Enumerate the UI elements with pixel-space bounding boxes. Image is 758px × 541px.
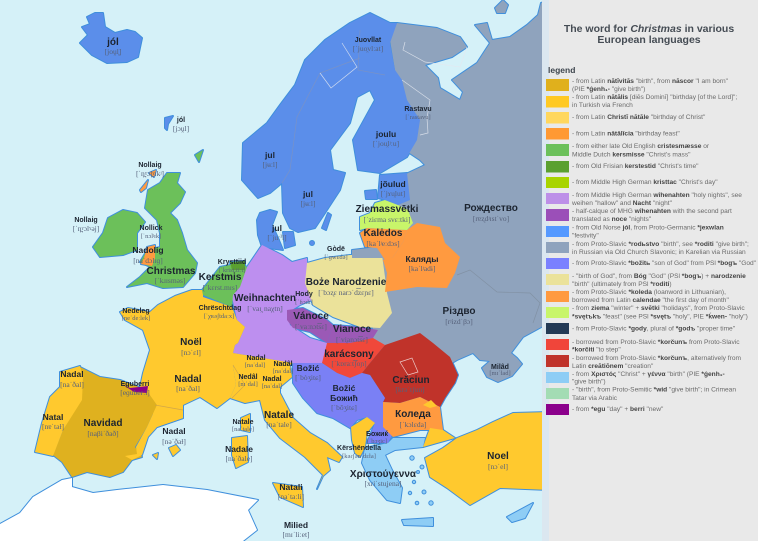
label: French: [nɔˈɛl] <box>181 348 201 357</box>
label: Icelandic: jól <box>106 37 119 48</box>
label: Maltese: [mɪˈliːet] <box>282 530 310 539</box>
legend item: bozitь <box>546 258 757 269</box>
label: Faroese <box>173 117 189 133</box>
label: Sicilian <box>278 482 304 501</box>
label: Friulian: [naˈdal] <box>273 368 293 375</box>
label: German: [ˈvaɪ̯ˌnaχtn̩] <box>247 304 283 314</box>
label: Sicilian: Natali <box>279 482 303 492</box>
label: Kashubian: [ˈɡwɛdə] <box>324 254 348 261</box>
label: Belarusian: [kaˈlʲadɨ] <box>409 264 435 273</box>
region: Lithuania <box>360 228 407 260</box>
label: Maltese <box>282 520 310 539</box>
region: Bulgarian Turkish patch <box>423 400 437 408</box>
label: West Frisian: [ˈkrist.tiːt] <box>219 267 245 274</box>
label: Finnish: joulu <box>375 129 396 139</box>
label: Bulgarian: [ˈkɔlɛda] <box>400 420 426 429</box>
label: Piedmontese: Nedâl <box>238 374 258 381</box>
label: Sorbian: [ˈɦɔdɪ] <box>295 299 313 306</box>
label: Czech: [ˈvaːnɔt͡sɛ] <box>295 322 327 331</box>
label: Scottish Gaelic: [ˈn̪ˠɔl̪ˠɪkʲ] <box>136 169 164 178</box>
label: Turkish: [nɔˈel] <box>488 462 508 471</box>
label: Bulgarian: Коледа <box>395 409 431 420</box>
region: Scandinavia and Finland <box>242 13 420 232</box>
region: Sicily <box>273 483 303 507</box>
label: Russian <box>464 203 518 223</box>
label: Scottish Gaelic <box>136 162 164 178</box>
label: Spanish: Navidad <box>84 418 122 429</box>
label: Corsican <box>232 419 254 433</box>
region: Russia, Ukraine <box>372 0 550 382</box>
region: Hungary <box>322 338 385 378</box>
label: Italian <box>264 410 294 429</box>
legend item: Greek: - from Χριστός "Christ" + γέννα "birth" (PIE *ǵenh₁- <box>572 371 725 378</box>
label: English: Christmas <box>147 266 196 277</box>
legend item: korcunь: *korčiti "to step" <box>572 346 621 354</box>
label: Sardinian: Nadale <box>225 444 253 454</box>
label: Sicilian: [naˈtaːli] <box>278 492 304 501</box>
label: Karelian <box>404 106 432 121</box>
label: Irish <box>73 217 99 233</box>
region: Shetland <box>195 150 203 162</box>
label: Slovak: [ˈvi̯anɔt͡sɛ] <box>336 335 368 344</box>
legend item: natalis <box>546 94 737 109</box>
label: Hungarian: [ˈkɒraːt͡ʃoɲ] <box>331 359 367 368</box>
legend item: jol: - from Old Norse jól, from Proto-Germanic *jexwlan <box>572 224 724 232</box>
label: Portuguese <box>42 412 64 431</box>
region: Thrace <box>423 428 455 447</box>
legend item: Boze Narodzenie <box>546 273 746 288</box>
label: Catalan: Nadal <box>162 426 186 436</box>
label: Danish: jul <box>271 223 282 233</box>
label: Serbo-Croatian: Božić <box>333 383 356 393</box>
legend item: Semitic <box>546 386 736 402</box>
label: Romansh <box>245 355 266 369</box>
label: Breton <box>122 308 150 322</box>
legend item: jol <box>546 224 724 240</box>
label: Latvian: [ˈziɛma svɛːtki] <box>364 215 410 224</box>
legend item: Boze Narodzenie: "birth" (ultimately from PSl *roditi) <box>572 281 672 288</box>
legend item: rodistvo: - from Proto-Slavic *rodьstvo "birth", see *roditi "give birth"; <box>572 241 749 248</box>
label: Kashubian: Gòdë <box>327 246 345 253</box>
legend item: natalis: - from Latin nātālis [diēs Dominī] "birthday [of the Lord]"; <box>572 94 737 101</box>
legend item: bozitь: - from Proto-Slavic *božitь "son of God" from PSl *bogъ "God" <box>572 260 757 267</box>
label: Sorbian <box>295 291 313 306</box>
region: Albania <box>351 417 375 457</box>
legend item: cristesmaesse: Middle Dutch kersmisse "Christ's mass" <box>572 152 691 158</box>
label: Latvian: Ziemassvētki <box>356 204 419 215</box>
label: Czech: Vánoce <box>293 311 329 322</box>
legend item: gody <box>546 323 736 334</box>
label: Turkish <box>487 451 509 471</box>
label: Norwegian: [jʉːl] <box>262 160 278 169</box>
label: Slovak: Vianoce <box>333 324 372 335</box>
label: Macedonian: [ˈbɔʒic] <box>367 438 387 445</box>
label: Friulian <box>273 361 293 375</box>
label: Belarusian <box>405 254 439 273</box>
label: Polish <box>306 277 387 297</box>
region: Spain <box>53 367 157 477</box>
label: German: Weihnachten <box>234 293 296 304</box>
label: Estonian <box>379 179 406 198</box>
label: Catalan: [nəˈðaɫ] <box>162 437 186 446</box>
region: Catalonia and Valencia <box>125 391 183 460</box>
label: Polish: [ˈbɔʐɛ narɔˈd͡zɛɲɛ] <box>318 287 374 297</box>
legend heading: legend <box>548 65 575 75</box>
region: Faroe Islands <box>165 116 173 130</box>
region: Crete <box>402 518 433 526</box>
label: Crimean Tatar: [mɪˈɫad] <box>489 370 511 377</box>
label: Venetian: [naˈdal] <box>262 383 282 390</box>
label: Italian: Natale <box>264 410 294 421</box>
label: Greek: [xɾiˈstuʝena] <box>364 479 402 488</box>
map: land regions <box>0 0 550 541</box>
label: Macedonian <box>366 430 388 445</box>
map labels <box>42 37 518 539</box>
region: Sardinia <box>232 436 248 468</box>
legend item: koleda: borrowed from Latin calendae "the first day of month" <box>572 297 729 304</box>
label: Norwegian: jul <box>264 150 275 160</box>
label: Estonian: [ˈjɤu̯lut] <box>381 189 405 198</box>
legend item: nativitas: - from Latin nātīvitās "birth", from nāscor "I am born" <box>572 78 729 85</box>
label: Slovak <box>333 324 372 344</box>
label: Corsican: [naˈtale] <box>232 426 254 433</box>
label: Hungarian <box>324 349 374 368</box>
legend item: Semitic: Tatar via Arabic <box>572 395 618 402</box>
region: Germany, Austria, Switzerland <box>232 245 327 363</box>
label: Lithuanian: Kalėdos <box>364 228 403 239</box>
region: Great Britain <box>127 173 197 288</box>
legend item: kristtac: - from Middle High German kristtac "Christ's day" <box>572 179 718 186</box>
label: Serbo-Croatian <box>330 383 358 412</box>
label: Bulgarian <box>395 409 431 429</box>
label: Occitan <box>174 374 202 393</box>
label: Occitan: Nadal <box>174 374 202 385</box>
legend item: wihenahten: - from Middle High German wîhenahten "holy nights", see <box>572 192 742 199</box>
label: Slovene <box>295 363 321 382</box>
label: Welsh: Nadolig <box>132 245 164 255</box>
region: Czechia <box>287 308 333 343</box>
label: Venetian <box>262 376 282 390</box>
title: The word for Christmas in various <box>564 23 734 35</box>
legend item: gody: - from Proto-Slavic *gody, plural of *godъ "proper time" <box>572 326 736 332</box>
region: Ireland <box>93 210 145 257</box>
label: Latvian <box>356 204 419 224</box>
legend item: half-calque noce <box>546 208 732 223</box>
label: Hungarian: karácsony <box>324 349 374 360</box>
label: Friulian: Nadâl <box>273 361 293 368</box>
region: Bulgaria <box>383 397 443 437</box>
label: Dutch <box>199 272 242 292</box>
label: Northern Sami: [ˈjuo̯vlːat] <box>353 44 383 53</box>
legend item: wihenahten: weihen "hallow" and Nacht "night" <box>571 200 673 207</box>
label: Welsh: [naˈdɔlɪɡ] <box>133 256 163 265</box>
region: Corsica <box>241 414 250 432</box>
label: Belarusian: Каляды <box>405 254 439 264</box>
label: Turkish: Noel <box>487 451 509 462</box>
label: Greek <box>350 469 417 488</box>
region: Hebrides <box>140 180 148 192</box>
label: Spanish <box>84 418 122 438</box>
label: Ukrainian <box>443 306 475 326</box>
label: Czech <box>293 311 329 331</box>
label: Swedish: jul <box>302 189 313 199</box>
label: Venetian: Nadal <box>262 376 282 383</box>
label: Luxembourgish <box>199 305 241 320</box>
label: Basque: [eɡuberːi] <box>120 388 150 397</box>
label: Luxembourgish: Chrëschtdag <box>199 305 241 312</box>
label: Faroese: jól <box>176 117 185 124</box>
label: Russian: Рождество <box>464 203 518 214</box>
region: Wales <box>141 245 155 266</box>
label: Norwegian <box>262 150 278 169</box>
legend item: creationem: Latin creātiōnem "creation" <box>572 363 654 370</box>
region: Latvia <box>360 200 413 230</box>
label: Crimean Tatar <box>489 364 511 377</box>
region: Gotland <box>322 213 331 230</box>
label: Serbo-Croatian: Божић <box>330 393 358 403</box>
label: Swedish <box>300 189 316 208</box>
label: Italian: [naˈtale] <box>266 420 292 429</box>
legend item: cristesmaesse: - from either late Old English cristesmæsse or <box>572 143 710 150</box>
label: Icelandic: [joṷl̥] <box>105 47 121 56</box>
region: Basque Country <box>122 384 148 393</box>
label: Finnish: [ˈjou̯lʲːu] <box>373 139 399 148</box>
region: Denmark Zealand <box>283 232 295 248</box>
label: Irish: [ˈn̪ˠɔlˠəj] <box>73 224 99 233</box>
label: Crimean Tatar: Milâd <box>491 364 509 371</box>
legend item: koleda <box>546 289 729 304</box>
legend item: creationem: - borrowed from Proto-Slavic *korčunъ, alternatively from <box>572 355 741 362</box>
label: Russian: [rɐʐdʲɪstˈvo] <box>473 214 509 223</box>
label: Albanian: [kəɾʃənˈdɛɫa] <box>342 453 376 460</box>
label: Breton: Nedeleg <box>122 308 150 315</box>
label: Danish: [ˈjuːˀl] <box>267 233 287 242</box>
label: Slovene: [ˈbòʒitɕ] <box>295 373 321 382</box>
label: Manx: [ˈnɔlʲɪk] <box>141 233 161 240</box>
label: Galician: Nadal <box>60 369 84 379</box>
legend item: kerstestid <box>546 161 699 172</box>
label: Catalan <box>162 426 186 446</box>
label: Lithuanian <box>364 228 403 248</box>
label: Serbo-Croatian: [ˈbôʒitɕ] <box>331 403 357 412</box>
legend item: natalicia <box>546 128 680 140</box>
label: Danish <box>267 223 287 242</box>
label: Galician: [naˈðal] <box>60 380 84 389</box>
label: Swedish: [jʉːl] <box>300 199 316 208</box>
label: English <box>147 266 196 285</box>
region: Slovakia <box>327 325 378 343</box>
label: Breton: [neˈdeːlek] <box>122 315 150 322</box>
label: Piedmontese <box>238 374 258 388</box>
label: Romansh: [naˈdal] <box>245 362 265 369</box>
label: Galician <box>60 369 84 389</box>
label: Macedonian: Божиќ <box>366 430 388 438</box>
legend item: Christi natale <box>546 112 706 124</box>
label: Basque: Eguberri <box>121 381 149 388</box>
label: Sardinian <box>225 444 253 463</box>
legend item: half-calque noce: translated as noce "nights" <box>572 216 652 223</box>
label: Irish: Nollaig <box>74 217 98 224</box>
region: Estonia <box>378 173 410 205</box>
label: Ukrainian: [rʲizdˈβɔ] <box>445 317 473 326</box>
region: Iceland <box>80 13 142 63</box>
region: Frisian <box>230 261 245 270</box>
label: Icelandic <box>105 37 121 56</box>
legend item: jol: "festivity" <box>572 232 599 240</box>
label: Estonian: jõulud <box>379 179 406 189</box>
legend item: Basque: - from *egu "day" + berri "new" <box>572 406 664 413</box>
region: Portugal and Galicia <box>35 366 83 456</box>
legend item: ziema svetki <box>546 305 748 320</box>
region: Africa <box>0 478 258 541</box>
label: Sorbian: Hody <box>295 291 313 298</box>
label: West Frisian: Krysttiid <box>218 259 246 266</box>
label: French: Noël <box>180 337 202 348</box>
legend item: Basque <box>546 404 664 415</box>
label: Karelian: Rastavu <box>404 106 432 113</box>
label: West Frisian <box>218 259 246 274</box>
region: Benelux Dutch speaking <box>202 263 247 307</box>
label: Scottish Gaelic: Nollaig <box>138 162 162 169</box>
label: Kashubian <box>324 246 348 261</box>
legend item: korcunь <box>546 339 740 354</box>
label: Corsican: Natale <box>232 419 254 426</box>
label: Faroese: [jɔṷl] <box>173 124 189 133</box>
legend item: natalis: in Turkish via French <box>572 102 633 109</box>
label: Northern Sami <box>353 37 383 53</box>
label: Occitan: [naˈðal] <box>176 384 200 393</box>
label: Manx: Nollick <box>140 225 163 232</box>
region: Belarus <box>383 223 460 292</box>
borders <box>155 30 540 410</box>
label: Lithuanian: [kaˈlʲeːdɔs] <box>366 239 400 248</box>
legend item: koleda: - from Proto-Slavic *koleda (loanword in Lithuanian), <box>572 289 726 296</box>
region: Former Yugoslavia <box>293 363 392 443</box>
label: Luxembourgish: [ˈχʀəʃtdaːx] <box>204 313 234 320</box>
region: Balearic Mallorca <box>169 445 180 456</box>
legend item: rodistvo <box>546 241 749 256</box>
legend item: ziema svetki: *svętъkъ "feast" (see PSl *svętъ "holy", PIE *ḱwen- "holy") <box>572 312 748 320</box>
label: Piedmontese: [nɪˈdal] <box>238 381 258 388</box>
title: European languages <box>597 34 701 46</box>
legend item: Semitic: - "birth", from Proto-Semitic *wid "give birth"; in Crimean <box>572 386 736 394</box>
label: Finnish <box>373 129 399 148</box>
panel: title and legend <box>542 0 758 541</box>
label: Albanian: Kërshëndella <box>337 445 381 452</box>
label: Portuguese: [nɐˈtaɫ] <box>42 422 64 431</box>
legend item: wihenahten <box>546 192 742 207</box>
label: English: [ˈkɹɪsməs] <box>155 276 185 285</box>
legend item: korcunь: - borrowed from Proto-Slavic *korčunъ from Proto-Slavic <box>572 339 740 346</box>
label: Basque <box>120 381 150 397</box>
region: Kaliningrad <box>352 247 385 258</box>
legend item: nativitas: (PIE *ǵenh₁- "give birth") <box>572 86 645 93</box>
label: Maltese: Milied <box>284 520 308 530</box>
legend item: nativitas <box>546 78 729 93</box>
legend item: creationem <box>546 355 741 370</box>
region: Turkey <box>425 412 550 505</box>
label: Ukrainian: Різдво <box>443 306 475 317</box>
region: Denmark Jutland <box>257 210 283 250</box>
label: Romanian: [krəˈtʃun] <box>395 385 425 394</box>
label: Karelian: [ˈrastavu] <box>405 114 431 121</box>
label: Welsh <box>132 245 164 265</box>
label: German <box>234 293 296 314</box>
legend item: natalicia: - from Latin nātālīcia "birthday feast" <box>572 130 680 138</box>
legend item: Christi natale: - from Latin Christī nātāle "birthday of Christ" <box>572 114 706 121</box>
region: Poland <box>305 255 392 328</box>
region: Balearic Ibiza <box>153 453 158 459</box>
legend item: ziema svetki: - from ziema "winter" + svētki "holidays", from Proto-Slavic <box>572 305 745 312</box>
region: Romania and Moldova <box>362 333 458 407</box>
legend item: half-calque noce: - half-calque of MHG wîhenahten with the second part <box>572 208 732 215</box>
label: Portuguese: Natal <box>43 412 63 422</box>
region: Greece mainland <box>362 438 425 503</box>
region: Italy <box>230 353 342 489</box>
label: Manx <box>140 225 163 240</box>
label: Polish: Boże Narodzenie <box>306 277 387 288</box>
region: Aegean islands <box>409 456 433 505</box>
region: France <box>120 290 245 427</box>
label: Northern Sami: Juovllat <box>355 37 382 44</box>
label: Romansh: Nadal <box>246 355 266 362</box>
legend item: cristesmaesse <box>546 143 710 158</box>
legend item: rodistvo: in Russian via Old Church Slavonic; in Karelian via Russian <box>572 249 746 256</box>
label: Sardinian: [naˈðale] <box>225 454 253 463</box>
label: Albanian <box>337 445 381 460</box>
label: Dutch: Kerstmis <box>199 272 242 283</box>
legend item: kerstestid: - from Old Frisian kerstestid "Christ's time" <box>572 163 699 170</box>
region: Skye <box>149 170 156 177</box>
legend item: Greek: "give birth") <box>572 378 606 386</box>
label: Romanian: Crăciun <box>392 375 430 386</box>
legend item: kristtac <box>546 177 718 188</box>
region: Estonian islands <box>365 190 377 199</box>
label: French <box>180 337 202 357</box>
region: Cyprus <box>507 503 533 522</box>
label: Dutch: [ˈkɛrst.mɪs] <box>203 283 237 292</box>
label: Greek: Χριστούγεννα <box>350 469 417 480</box>
label: Slovene: Božić <box>297 363 320 373</box>
label: Spanish: [naβiˈðað] <box>87 429 119 438</box>
label: Romanian <box>392 375 430 394</box>
legend item: Greek <box>546 371 725 386</box>
legend item: Boze Narodzenie: - "birth of God", from Bóg "God" (PSl *bogъ) + narodzenie <box>572 273 746 280</box>
region: Bornholm <box>310 241 314 245</box>
